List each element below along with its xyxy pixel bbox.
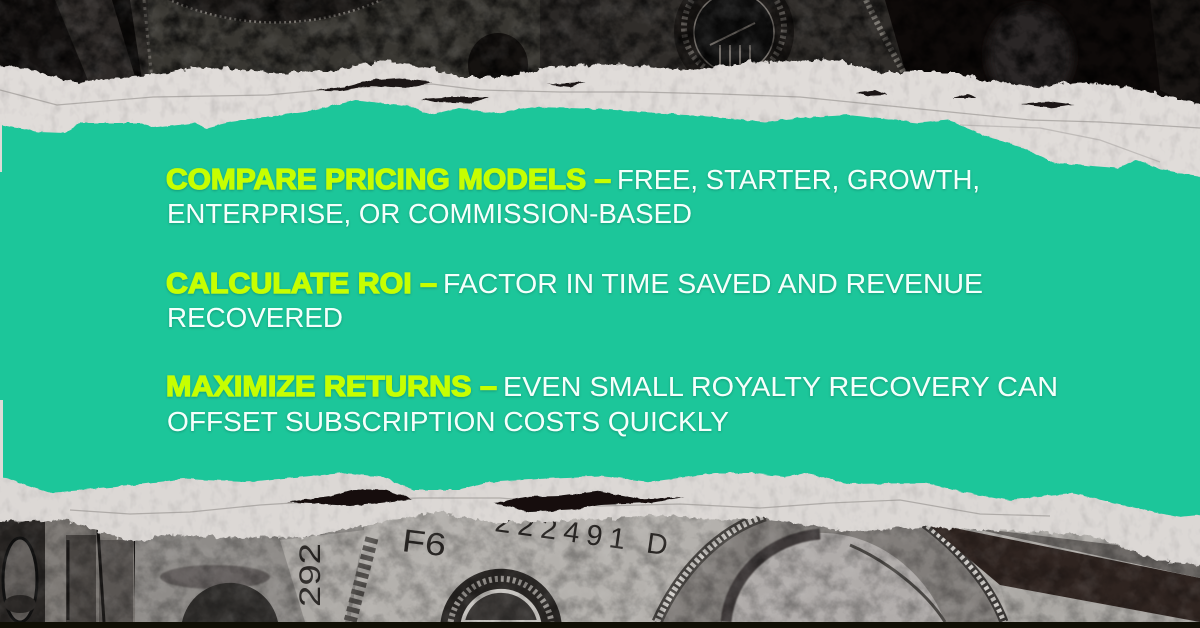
heading: compare pricing models: COMPARE PRICING MODELS – bbox=[166, 164, 611, 196]
paper tears bbox=[287, 489, 684, 512]
left seal bbox=[182, 583, 278, 622]
heading: calculate ROI: CALCULATE ROI – bbox=[166, 268, 437, 300]
heading: maximize returns: MAXIMIZE RETURNS – bbox=[166, 371, 497, 403]
bill serial marks: 222491 D bbox=[493, 506, 670, 562]
torn paper: bottom bbox=[0, 440, 1200, 566]
right seal bbox=[440, 569, 562, 622]
body line: factor: FACTOR IN TIME SAVED AND REVENUE bbox=[443, 268, 983, 299]
torn paper: top bbox=[0, 60, 1200, 210]
bill serial marks bbox=[294, 506, 670, 607]
body line: offset: OFFSET SUBSCRIPTION COSTS QUICKLY bbox=[167, 406, 729, 437]
body line: enterprise: ENTERPRISE, OR COMMISSION-BASED bbox=[167, 198, 692, 229]
body line: even small: EVEN SMALL ROYALTY RECOVERY CAN bbox=[503, 371, 1058, 402]
text block: ROI bbox=[166, 268, 983, 333]
background: dark dollar bill, top bbox=[0, 0, 1200, 130]
top seal bbox=[674, 0, 794, 92]
teal panel bbox=[0, 100, 1200, 517]
bill dark band bbox=[925, 522, 1200, 622]
body line: recovered: RECOVERED bbox=[167, 302, 343, 333]
bill portrait bbox=[655, 510, 1004, 622]
text block: returns bbox=[166, 371, 1058, 437]
bill serial marks: 292 bbox=[294, 543, 327, 607]
body line: pricing tiers: FREE, STARTER, GROWTH, bbox=[617, 164, 980, 195]
left edge paper slivers bbox=[0, 122, 3, 478]
bottom dark bar bbox=[0, 622, 1200, 628]
text block: pricing models bbox=[166, 164, 980, 229]
paper tears bbox=[314, 78, 1074, 108]
bill serial marks: F6 bbox=[400, 522, 448, 563]
background: dollar bill, bottom bbox=[0, 490, 1200, 622]
